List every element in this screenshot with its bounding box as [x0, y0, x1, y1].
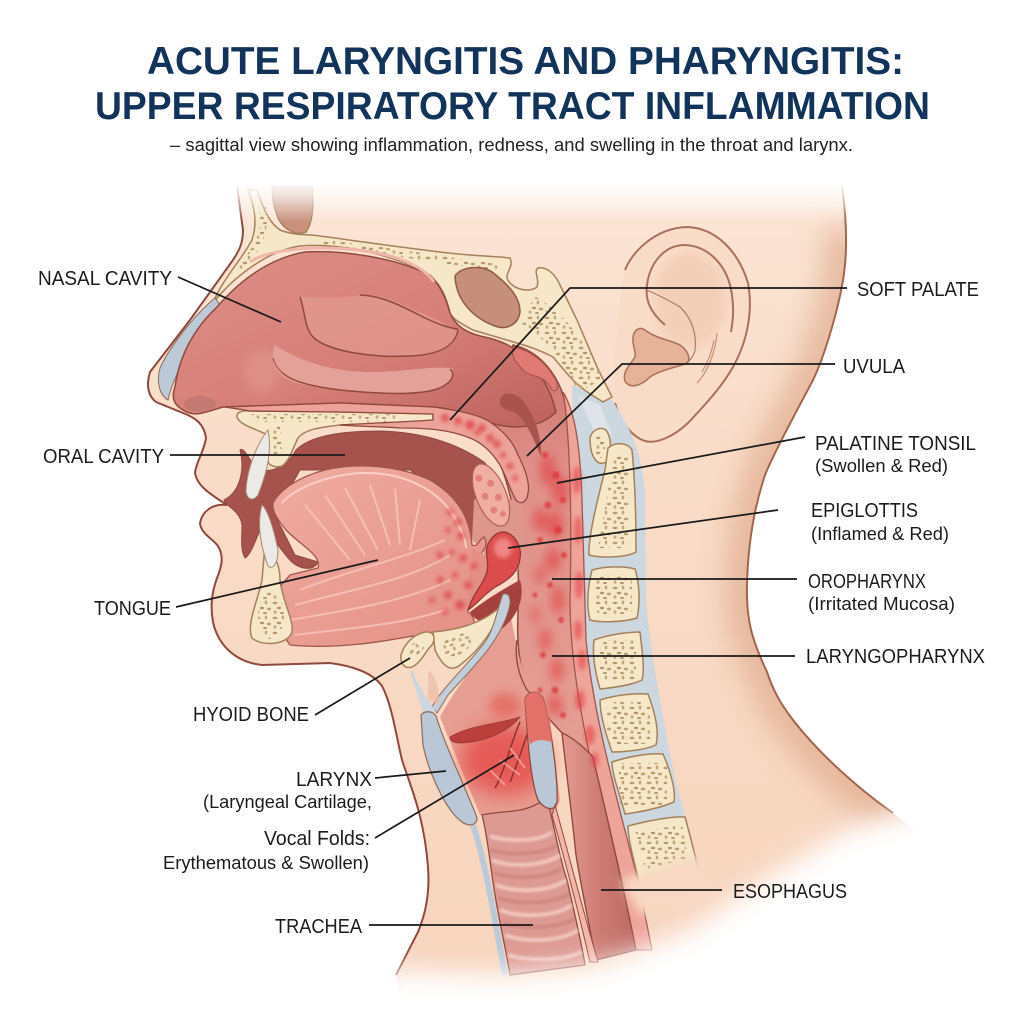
retro-lingual pink mucosa	[472, 495, 523, 590]
leader lines	[170, 277, 847, 925]
redness: posterior wall	[573, 466, 599, 768]
title: UPPER RESPIRATORY TRACT INFLAMMATION	[95, 85, 930, 128]
title: ACUTE LARYNGITIS AND PHARYNGITIS:	[147, 40, 904, 83]
tonsil swollen	[465, 459, 517, 531]
epiglottis	[468, 532, 522, 630]
redness: nasopharynx	[512, 347, 557, 391]
label: palatine tonsil: PALATINE TONSIL	[815, 433, 976, 455]
label: palatine tonsil	[815, 433, 976, 476]
label: soft palate: SOFT PALATE	[857, 279, 979, 301]
label: oral cavity: ORAL CAVITY	[43, 446, 164, 468]
label: larynx	[163, 769, 372, 873]
redness: mucosa speckles	[532, 452, 567, 718]
cervical spine backing band	[572, 385, 698, 905]
nose cartilage	[158, 298, 220, 400]
vocal fold inflammation	[450, 693, 550, 795]
vertebra fade	[620, 855, 720, 915]
frontal sinus	[272, 186, 313, 233]
label: trachea: TRACHEA	[275, 916, 363, 938]
cervical vertebrae	[588, 428, 698, 885]
skin edge shading	[747, 230, 893, 813]
skull base bone	[213, 190, 612, 402]
head and neck skin silhouette	[148, 186, 915, 1000]
redness: tongue base	[429, 508, 478, 615]
face outline	[148, 186, 428, 975]
thyroid bone plate	[433, 607, 500, 668]
label: larynx: LARYNX	[296, 769, 372, 791]
title	[95, 40, 930, 128]
tracheal wall strip	[552, 805, 598, 962]
subtitle: – sagittal view showing inflammation, redness, and swelling in the throat and larynx.	[170, 134, 853, 155]
label: oropharynx	[808, 571, 955, 614]
anatomical illustration	[147, 186, 911, 989]
left laryngeal cartilage	[421, 712, 477, 825]
label: nasal cavity: NASAL CAVITY	[38, 268, 172, 290]
posterior pharyngeal wall strip	[563, 392, 652, 950]
label: larynx: Erythematous & Swollen)	[163, 853, 369, 873]
label: esophagus: ESOPHAGUS	[733, 881, 847, 903]
white fades	[130, 180, 860, 222]
pharynx mucosa	[490, 345, 593, 757]
soft palate	[225, 403, 529, 503]
label: larynx: Vocal Folds:	[264, 828, 370, 850]
tongue root next to epiglottis	[466, 548, 490, 614]
label: epiglottis: (Inflamed & Red)	[811, 524, 949, 544]
right laryngeal cartilage	[525, 692, 557, 809]
infrahyoid muscle	[410, 670, 436, 712]
label: epiglottis	[811, 500, 949, 544]
label: epiglottis: EPIGLOTTIS	[811, 500, 918, 522]
label: oropharynx: (Irritated Mucosa)	[808, 594, 955, 614]
oral cavity	[224, 431, 510, 568]
ear	[614, 227, 750, 442]
upper incisor	[246, 430, 270, 499]
label: uvula: UVULA	[843, 356, 906, 378]
label: tongue: TONGUE	[94, 598, 171, 620]
label: larynx: (Laryngeal Cartilage,	[203, 792, 372, 812]
label: laryngopharynx: LARYNGOPHARYNX	[806, 646, 985, 668]
back of neck outline	[747, 186, 893, 813]
nasal cavity	[173, 248, 556, 427]
hard palate bone	[237, 411, 433, 467]
hyoid bone	[401, 632, 434, 667]
redness: soft palate	[441, 414, 518, 481]
label: oropharynx: OROPHARYNX	[808, 571, 926, 593]
sphenoid sinus	[455, 267, 520, 327]
lower incisor	[260, 505, 278, 567]
trachea	[482, 798, 585, 975]
label: palatine tonsil: (Swollen & Red)	[815, 456, 948, 476]
epiglottic cartilage	[432, 594, 510, 713]
nasal turbinates	[300, 295, 458, 356]
redness: oropharynx	[531, 454, 568, 716]
lower jaw bone	[250, 545, 292, 644]
label: hyoid bone: HYOID BONE	[193, 704, 309, 726]
nasopharynx tube opening	[500, 393, 541, 456]
esophagus	[562, 733, 636, 960]
laryngeal interior	[440, 600, 560, 825]
tongue	[273, 466, 486, 646]
tracheal blue cartilage line	[473, 825, 505, 975]
